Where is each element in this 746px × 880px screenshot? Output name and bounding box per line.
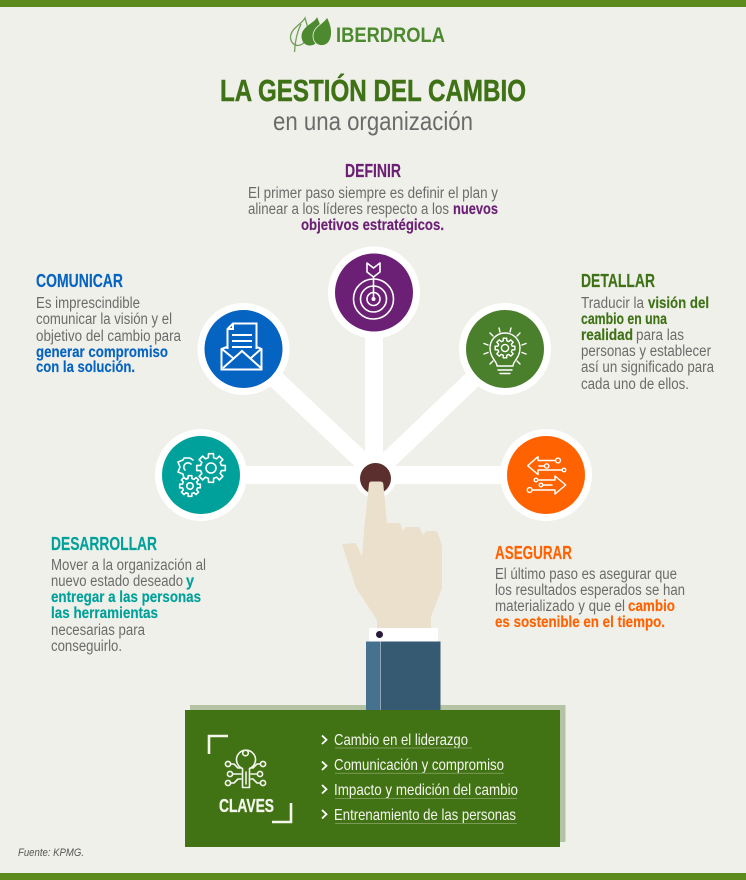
text block: detallar: personas y establecer xyxy=(581,343,711,360)
text block: detallar: Traducir la xyxy=(581,295,644,312)
bracket top-left xyxy=(209,736,228,754)
text block: detallar: así un significado para xyxy=(581,359,714,376)
text block: comunicar: COMUNICAR xyxy=(36,271,123,291)
text block: desarrollar: y xyxy=(186,573,194,590)
list item 4: Entrenamiento de las personas xyxy=(334,807,516,824)
text block: detallar: para las xyxy=(636,327,684,344)
text block: desarrollar: DESARROLLAR xyxy=(51,534,157,554)
text block: comunicar xyxy=(36,271,181,376)
icon: comunicar envelope xyxy=(198,303,290,395)
text block: asegurar: es sostenible en el tiempo. xyxy=(495,614,665,631)
text block: desarrollar: nuevo estado deseado xyxy=(51,573,183,590)
icon: key with circuit xyxy=(225,750,266,788)
text block: definir: DEFINIR xyxy=(345,161,401,181)
claves label: CLAVES xyxy=(219,796,274,816)
text block: definir: El primer paso siempre es definir el plan y xyxy=(248,185,498,202)
shirt cuff xyxy=(369,628,438,642)
text block: asegurar: cambio xyxy=(628,598,675,615)
panel: claves shadow xyxy=(190,705,566,842)
text block: asegurar xyxy=(495,543,685,631)
top bar xyxy=(0,0,746,7)
text block: detallar: cambio en una xyxy=(581,311,667,328)
text block: comunicar: Es imprescindible xyxy=(36,295,140,312)
text block: definir xyxy=(248,161,498,234)
text block: asegurar: El último paso es asegurar que xyxy=(495,566,677,583)
icon: desarrollar gears xyxy=(155,429,247,521)
list item 3: Impacto y medición del cambio xyxy=(334,782,518,799)
text block: comunicar: generar compromiso xyxy=(36,344,168,361)
text block: desarrollar xyxy=(51,534,206,655)
text block: definir: nuevos xyxy=(453,201,498,218)
text block: comunicar: con la solución. xyxy=(36,359,135,376)
logo wordmark: IBERDROLA xyxy=(336,24,445,47)
icon: logo leaves xyxy=(290,17,332,52)
spokes xyxy=(210,300,540,475)
text block: desarrollar: Mover a la organización al xyxy=(51,557,206,574)
text block: asegurar: ASEGURAR xyxy=(495,543,572,563)
illustration: hand with sleeve xyxy=(342,482,442,710)
text block: definir: alinear a los líderes respecto a los xyxy=(248,201,449,218)
text block: desarrollar: las herramientas xyxy=(51,605,158,622)
source note: Fuente: KPMG. xyxy=(18,847,84,859)
sleeve xyxy=(366,642,440,710)
hand xyxy=(342,482,442,629)
bracket bottom-right xyxy=(272,803,291,822)
text block: desarrollar: entregar a las personas xyxy=(51,589,201,606)
text block: detallar: realidad xyxy=(581,327,633,344)
text block: definir: objetivos estratégicos. xyxy=(301,217,444,234)
icon: detallar bulb xyxy=(459,303,551,395)
list item 2: Comunicación y compromiso xyxy=(334,757,504,774)
text block: asegurar: materializado y que el xyxy=(495,598,625,615)
subtitle: en una organización xyxy=(273,106,473,136)
logo: Iberdrola xyxy=(290,17,445,52)
text block: detallar: DETALLAR xyxy=(581,271,655,291)
panel: claves xyxy=(185,710,560,847)
text block: detallar: cada uno de ellos. xyxy=(581,376,689,393)
text block: desarrollar: conseguirlo. xyxy=(51,638,122,655)
title: LA GESTIÓN DEL CAMBIO xyxy=(220,72,526,108)
text block: desarrollar: necesarias para xyxy=(51,622,145,639)
center press button xyxy=(354,456,396,498)
text block: asegurar: los resultados esperados se han xyxy=(495,582,685,599)
icon: asegurar arrows xyxy=(500,429,592,521)
text block: comunicar: objetivo del cambio para xyxy=(36,328,181,345)
list item 1: Cambio en el liderazgo xyxy=(334,732,468,749)
cuff button xyxy=(376,631,383,638)
text block: comunicar: comunicar la visión y el xyxy=(36,311,172,328)
bottom bar xyxy=(0,873,746,880)
text block: detallar xyxy=(581,271,714,393)
text block: detallar: visión del xyxy=(648,295,709,312)
icon: definir target xyxy=(328,246,420,338)
